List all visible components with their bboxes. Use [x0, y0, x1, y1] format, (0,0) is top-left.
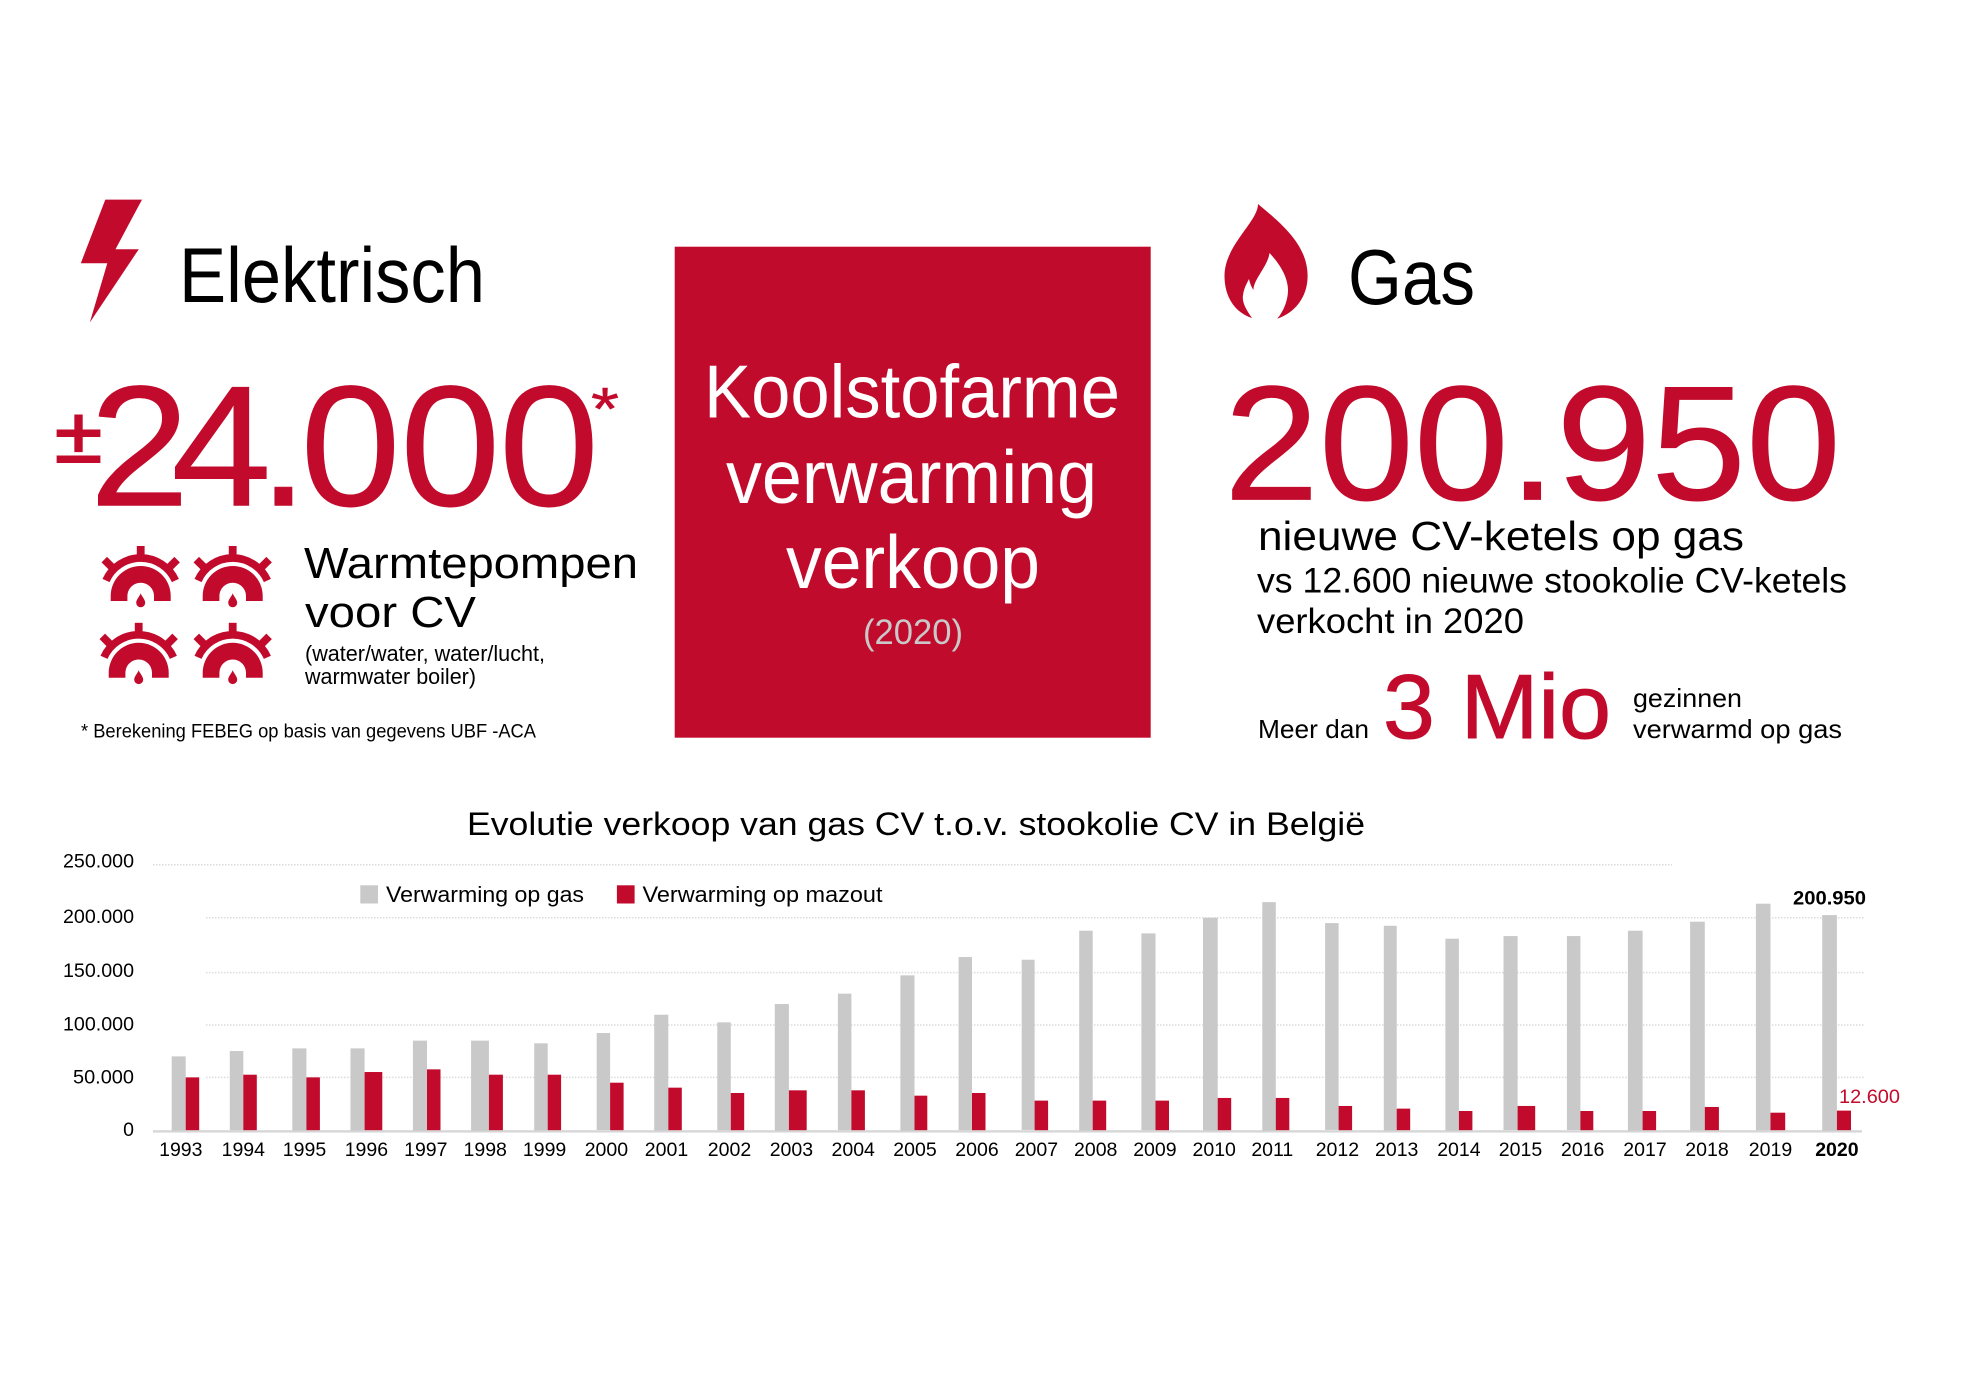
icons: four heat pumps [100, 546, 272, 684]
x axis year labels: 1995 [283, 1139, 326, 1161]
y axis labels: 0 [123, 1119, 134, 1141]
red square [675, 247, 1151, 738]
x axis year labels: 2013 [1375, 1139, 1418, 1161]
x axis year labels: 1996 [345, 1139, 388, 1161]
text: vs 12.600 [1257, 562, 1847, 641]
icon: flame [1224, 204, 1308, 319]
y axis labels: 100.000 [63, 1014, 134, 1036]
year: (2020) [863, 613, 963, 652]
legend: Verwarming op mazout [642, 882, 882, 907]
x axis year labels: 2020 [1815, 1139, 1859, 1161]
panel: Koolstofarme verwarming verkoop [675, 247, 1151, 738]
stat: 3 Mio: Meer dan [1258, 714, 1369, 744]
x axis year labels: 1994 [222, 1139, 265, 1161]
x axis year labels: 2004 [832, 1139, 875, 1161]
x axis year labels: 2001 [645, 1139, 688, 1161]
heading: Elektrisch: Elektrisch [179, 231, 485, 319]
x axis year labels: 2006 [955, 1139, 999, 1161]
y axis labels [63, 850, 134, 1141]
x axis year labels: 2014 [1437, 1139, 1481, 1161]
stat: 3 Mio [1258, 657, 1842, 758]
big number: 24.000: * [591, 376, 619, 442]
x axis year labels: 2007 [1015, 1139, 1058, 1161]
text: vs 12.600: vs 12.600 nieuwe stookolie CV-ketels [1257, 562, 1847, 600]
chart title: Evolutie verkoop van gas CV t.o.v. stookolie CV in België [467, 806, 1365, 842]
axis line [153, 1130, 1862, 1133]
x axis year labels: 2009 [1133, 1139, 1177, 1161]
x axis year labels: 2018 [1685, 1139, 1729, 1161]
text: Warmtepompen voor CV: Warmtepompen [304, 539, 638, 588]
x axis year labels: 2017 [1623, 1139, 1667, 1161]
callout: 12.600: 12.600 [1839, 1086, 1900, 1108]
center title: verwarming [726, 435, 1097, 519]
text: Warmtepompen voor CV: voor CV [305, 588, 477, 637]
y axis labels: 200.000 [63, 906, 134, 928]
big number: 200.950: 200.950 [1224, 352, 1841, 534]
x axis year labels: 2000 [585, 1139, 628, 1161]
x axis year labels [159, 1139, 1859, 1161]
x axis year labels: 1998 [464, 1139, 507, 1161]
text: vs 12.600: verkocht in 2020 [1257, 602, 1524, 641]
x axis year labels: 1993 [159, 1139, 202, 1161]
y axis labels: 150.000 [63, 960, 134, 982]
x axis year labels: 2012 [1316, 1139, 1359, 1161]
x axis year labels: 2002 [708, 1139, 751, 1161]
footnote: * Berekening FEBEG op basis van gegevens UBF -ACA [81, 722, 536, 742]
x axis year labels: 2011 [1251, 1139, 1293, 1161]
legend: Verwarming op gas [386, 882, 584, 907]
center title [704, 350, 1120, 604]
panel: Gas [1224, 204, 1847, 758]
center title: verkoop [786, 520, 1040, 604]
x axis year labels: 2016 [1561, 1139, 1604, 1161]
legend [360, 882, 882, 907]
y axis labels: 50.000 [73, 1066, 134, 1088]
stat: 3 Mio: gezinnen [1633, 683, 1742, 713]
bar chart [63, 850, 1900, 1161]
panel: Elektrisch [55, 200, 638, 743]
text: heat pump types: warmwater boiler) [304, 664, 476, 689]
center title: Koolstofarme [704, 350, 1120, 434]
text: heat pump types [304, 641, 545, 689]
big number: 24.000: ± [55, 391, 102, 479]
y axis labels: 250.000 [63, 850, 134, 872]
x axis year labels: 2019 [1749, 1139, 1792, 1161]
text: nieuwe CV-ketels op gas: nieuwe CV-ketels op gas [1258, 513, 1744, 559]
text: heat pump types: (water/water, water/lucht, [305, 641, 545, 666]
icon: lightning bolt [81, 200, 142, 322]
big number: 24.000: 24.000 [89, 350, 599, 543]
grid lines [153, 865, 1864, 1077]
stat: 3 Mio: 3 Mio [1383, 657, 1611, 758]
stat: 3 Mio: verwarmd op gas [1633, 714, 1842, 744]
x axis year labels: 2005 [893, 1139, 937, 1161]
x axis year labels: 1999 [523, 1139, 566, 1161]
mazout bars [186, 1069, 1851, 1130]
x axis year labels: 2008 [1074, 1139, 1117, 1161]
x axis year labels: 2010 [1193, 1139, 1236, 1161]
heading: Gas: Gas [1348, 233, 1475, 321]
gas bars [172, 902, 1837, 1131]
text: Warmtepompen voor CV [304, 539, 638, 637]
x axis year labels: 2003 [770, 1139, 813, 1161]
x axis year labels: 1997 [404, 1139, 447, 1161]
x axis year labels: 2015 [1499, 1139, 1542, 1161]
callout: 200.950: 200.950 [1793, 888, 1866, 910]
